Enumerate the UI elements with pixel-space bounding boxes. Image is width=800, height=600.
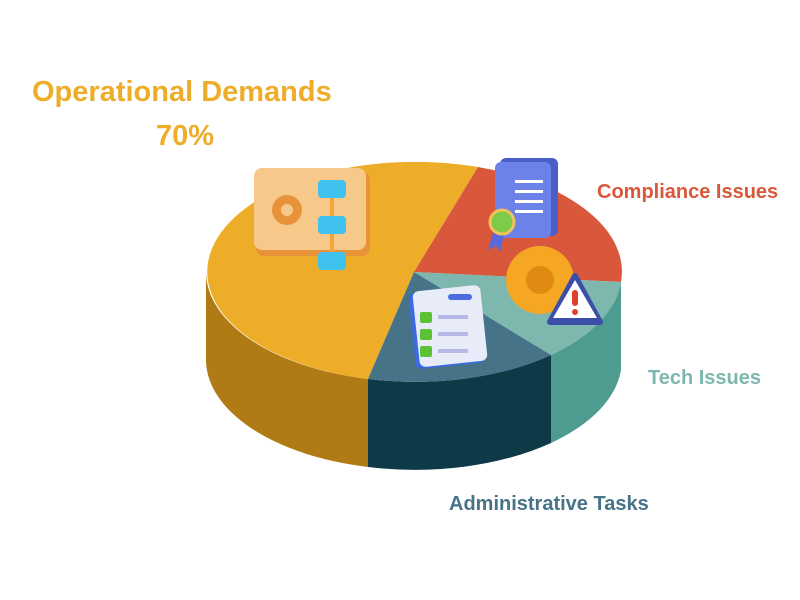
slice: compliance (414, 167, 622, 282)
slice: operational (207, 162, 478, 379)
label: operational demands: Operational Demands (32, 76, 332, 108)
label: compliance issues: Compliance Issues (597, 181, 778, 203)
side: administrative (368, 355, 551, 470)
icon: certificate (488, 158, 558, 252)
side: operational (206, 272, 368, 467)
label: administrative tasks: Administrative Tasks (449, 493, 649, 515)
side: tech (551, 282, 621, 443)
icon: gear panel (254, 168, 370, 270)
slice: administrative (368, 272, 551, 382)
icon: checklist (408, 285, 488, 369)
icon: gear warning (506, 246, 600, 322)
slice: tech (414, 272, 621, 355)
label: tech issues: Tech Issues (648, 367, 761, 389)
label: 70%: 70% (156, 120, 214, 152)
